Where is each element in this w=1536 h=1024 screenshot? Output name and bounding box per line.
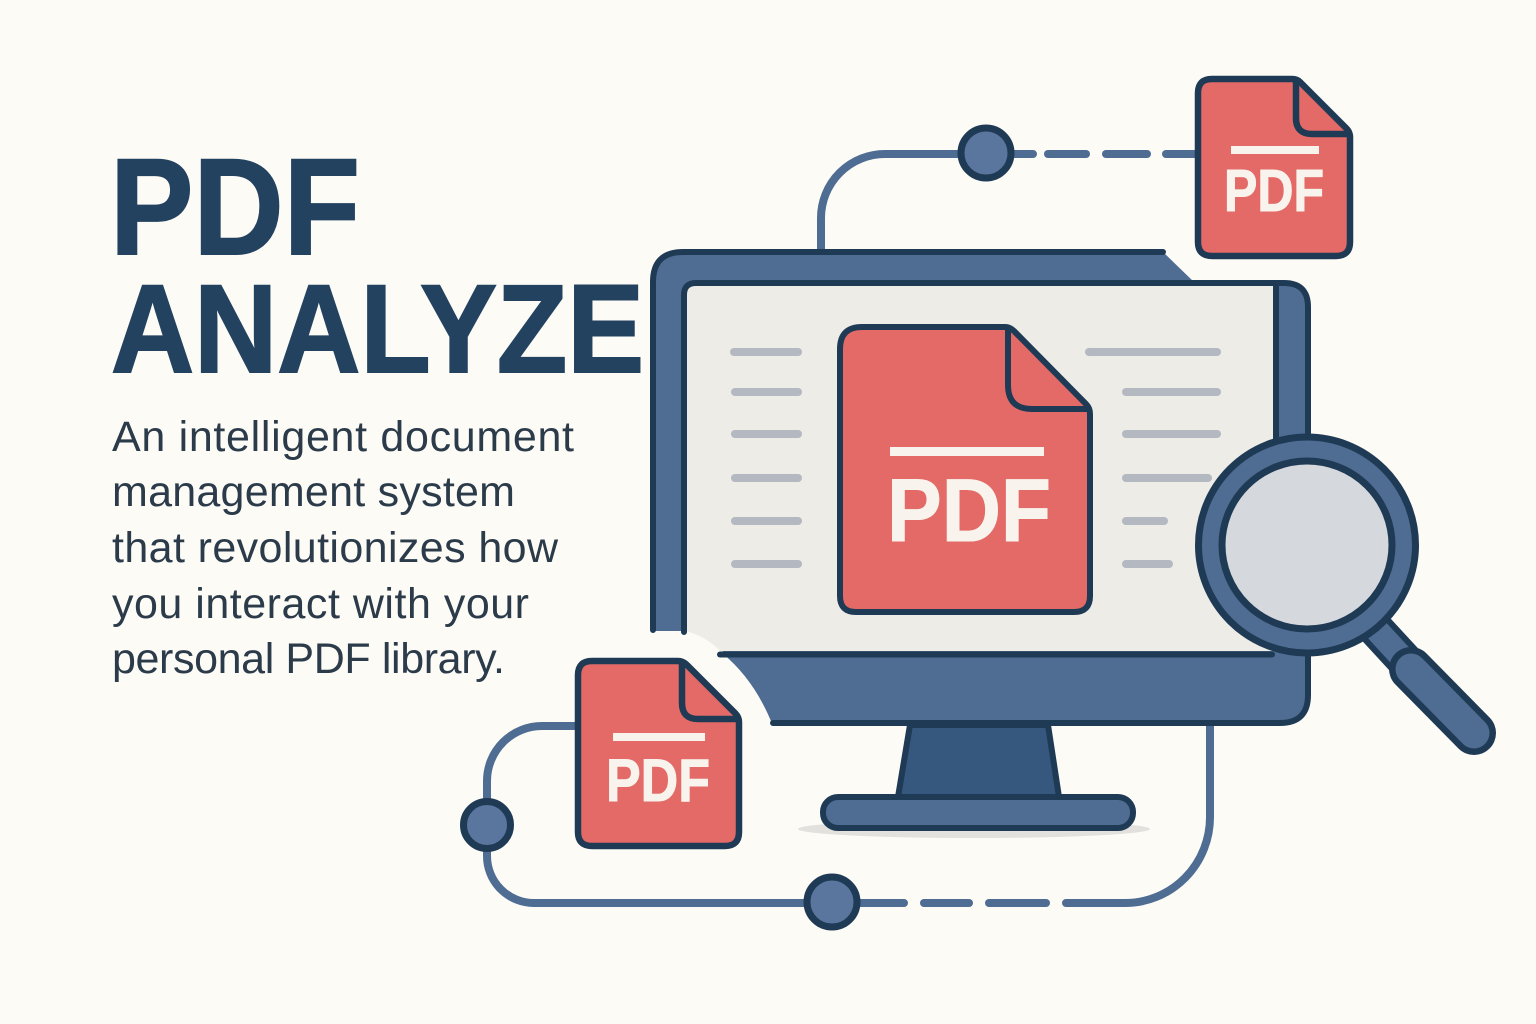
document rule <box>890 447 1044 456</box>
title <box>110 131 644 399</box>
document fold <box>682 662 737 719</box>
magnifying glass <box>1198 437 1474 733</box>
document label: PDF <box>887 460 1051 560</box>
screen text lines, left column <box>730 348 802 568</box>
description text: that revolutionizes how <box>112 524 559 572</box>
connector: monitor to top document <box>821 154 1198 252</box>
description text: management system <box>112 468 515 516</box>
top-right PDF document <box>1198 79 1350 256</box>
node: top connector <box>961 128 1011 178</box>
monitor screen <box>687 286 1273 680</box>
title: ANALYZE <box>111 260 644 399</box>
magnifier grip <box>1411 669 1474 733</box>
document fold <box>1296 80 1348 134</box>
monitor base <box>823 797 1133 828</box>
document rule <box>1231 146 1319 154</box>
description text: An intelligent document <box>112 413 574 461</box>
background cut-out curve <box>645 631 773 726</box>
monitor stand <box>898 725 1059 797</box>
description text: personal PDF library. <box>112 635 505 683</box>
node: bottom connector <box>807 877 857 927</box>
magnifier neck <box>1373 626 1408 664</box>
magnifier lens <box>1222 461 1392 629</box>
document fold <box>1008 328 1088 409</box>
document label: PDF <box>1224 158 1324 224</box>
title: PDF <box>110 131 360 284</box>
magnifier ring <box>1198 437 1416 653</box>
screen text lines, right column <box>1085 348 1221 568</box>
document rule <box>613 733 705 741</box>
monitor <box>645 252 1308 838</box>
document body <box>1198 79 1350 256</box>
document body <box>840 327 1090 612</box>
monitor outlines <box>653 252 1308 723</box>
node: left connector <box>464 802 510 848</box>
description text: you interact with your <box>112 580 529 628</box>
document label: PDF <box>606 747 710 814</box>
central PDF document <box>840 327 1090 612</box>
description text <box>112 413 574 683</box>
monitor base shadow <box>798 820 1150 838</box>
bottom-left PDF document <box>578 661 739 846</box>
monitor bezel <box>653 252 1308 723</box>
document body <box>578 661 739 846</box>
connector: bottom document to monitor <box>487 725 1210 903</box>
